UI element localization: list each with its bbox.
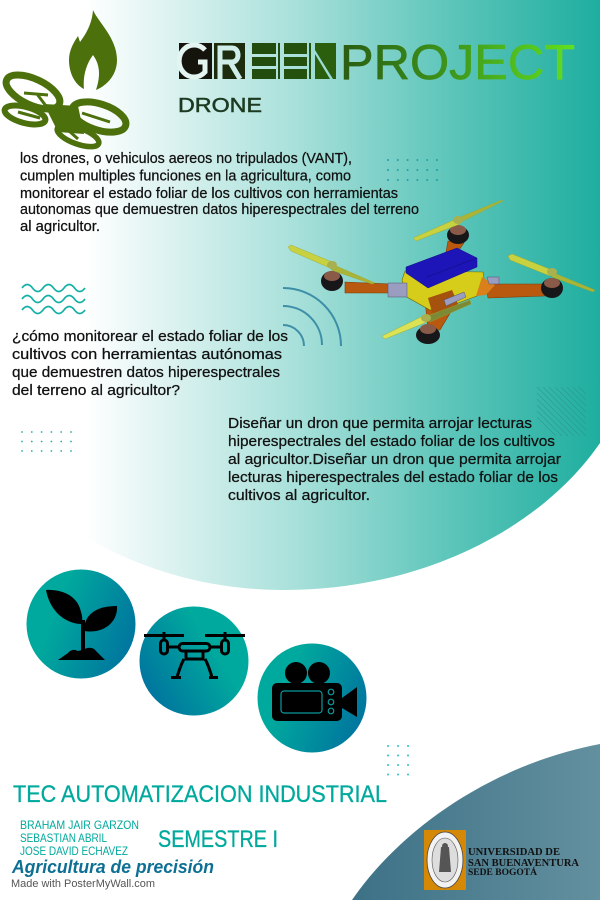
dot pattern left	[22, 432, 72, 451]
research question: cultivos con herramientas autónomas	[12, 347, 282, 363]
drone propellers	[288, 200, 595, 339]
drone hubs	[327, 216, 557, 322]
logo wordmark: GREEN PROJECT	[179, 36, 575, 90]
intro paragraph: cumplen multiples funciones en la agricultura, como	[20, 168, 351, 184]
dot pattern bottom	[388, 746, 412, 774]
icon: waves	[22, 284, 85, 314]
intro paragraph: autonomas que demuestren datos hiperespectrales del terreno	[20, 202, 419, 218]
research question: ¿cómo monitorear el estado foliar de los	[12, 329, 288, 345]
watermark: Made with PosterMyWall.com	[11, 878, 155, 890]
background teal gradient shape	[0, 0, 600, 590]
objective paragraph: hiperespectrales del estado foliar de los cultivos	[228, 434, 555, 450]
authors list: BRAHAM JAIR GARZON	[20, 818, 139, 832]
drone arms	[345, 241, 545, 330]
objective paragraph: Diseñar un dron que permita arrojar lecturas	[228, 416, 532, 432]
intro paragraph	[20, 151, 419, 235]
research question	[12, 329, 288, 399]
university seal	[424, 830, 466, 890]
research question: del terreno al agricultor?	[12, 383, 180, 399]
intro paragraph: al agricultor.	[20, 219, 100, 235]
drone servo blocks	[388, 277, 499, 306]
dot pattern top right	[388, 160, 438, 180]
university name: SEDE BOGOTÁ	[468, 867, 538, 877]
semester label: SEMESTRE I	[158, 826, 278, 853]
program title: TEC AUTOMATIZACION INDUSTRIAL	[13, 781, 387, 808]
objective paragraph	[228, 416, 561, 504]
authors list	[20, 818, 139, 858]
objective paragraph: al agricultor.Diseñar un dron que permita arrojar	[228, 452, 561, 468]
authors list: JOSE DAVID ECHAVEZ	[20, 844, 128, 858]
objective paragraph: cultivos al agricultor.	[228, 488, 370, 504]
drone 3D illustration	[288, 200, 595, 344]
research question: que demuestren datos hiperespectrales	[12, 365, 280, 381]
logo subtitle: DRONE: DRONE	[178, 95, 262, 117]
icon circle: camera	[258, 644, 366, 752]
authors list: SEBASTIAN ABRIL	[20, 831, 107, 845]
objective paragraph: lecturas hiperespectrales del estado foliar de los	[228, 470, 558, 486]
university name	[468, 846, 579, 877]
university name: SAN BUENAVENTURA	[468, 857, 579, 869]
intro paragraph: los drones, o vehiculos aereos no tripulados (VANT),	[20, 151, 352, 167]
drone frame plate	[402, 271, 484, 310]
hatch pattern	[537, 387, 586, 436]
tagline: Agricultura de precisión	[11, 857, 214, 877]
icon: green drone and flame logo	[1, 10, 130, 151]
icon circle: drone	[140, 606, 248, 716]
icon: signal arcs	[283, 288, 341, 346]
icon circle: plant	[26, 570, 136, 678]
drone motors	[321, 225, 563, 344]
university name: UNIVERSIDAD DE	[468, 846, 560, 858]
bottom corner shape	[352, 744, 600, 900]
intro paragraph: monitorear el estado foliar de los cultivos con herramientas	[20, 186, 398, 202]
logo wordmark: GREEN PROJECT: PROJECT	[340, 36, 575, 90]
drone battery	[406, 248, 477, 288]
